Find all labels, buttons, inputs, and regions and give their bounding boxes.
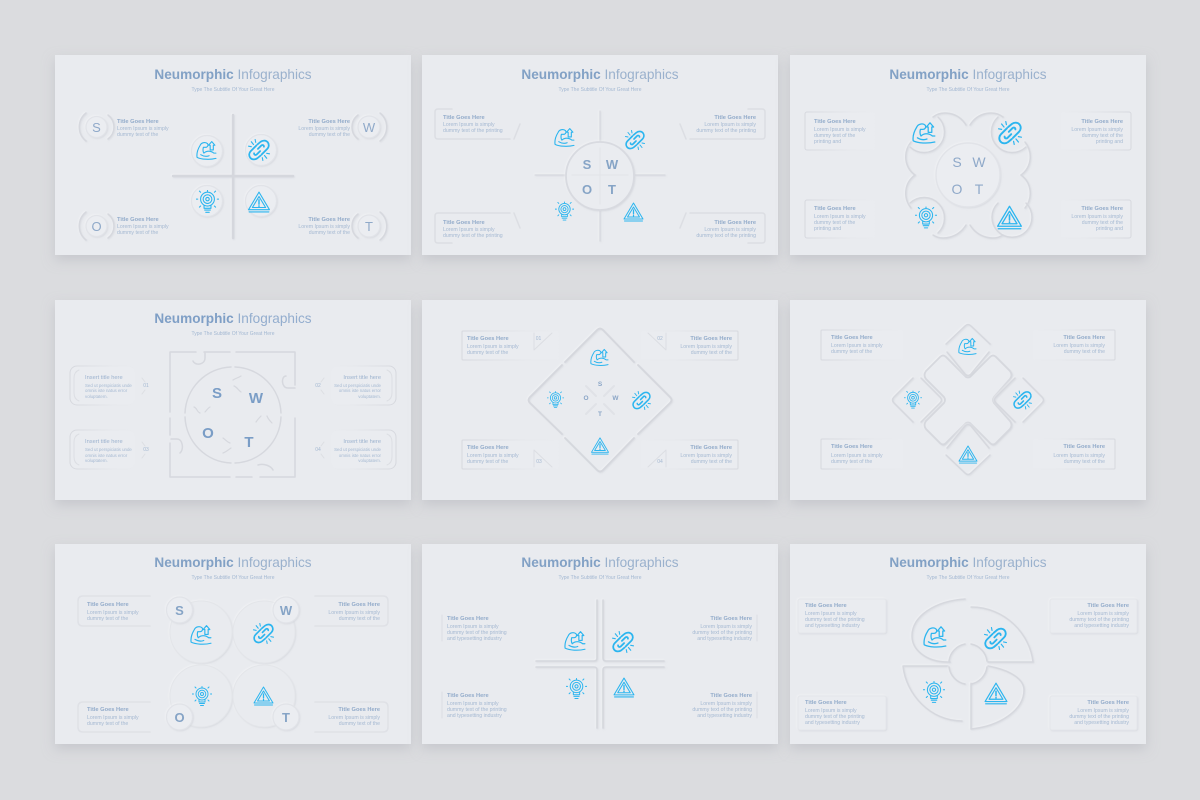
text box 04: Lorem Ipsum is simply (680, 453, 732, 459)
letters: O (582, 182, 592, 197)
text box: top left: Title Goes Here (831, 335, 873, 341)
panel: SWOT cross and diamonds (790, 300, 1146, 500)
text block: bottom right: Lorem Ipsum is simply (700, 701, 752, 707)
icon: warning (624, 203, 643, 221)
title: Neumorphic Infographics (521, 67, 679, 82)
text box 02: Lorem Ipsum is simply (680, 344, 732, 350)
text box: bottom right: Title Goes Here (1063, 444, 1105, 450)
subtitle: Type The Subtitle Of Your Great Here (558, 575, 642, 581)
text box: bottom left: Title Goes Here (831, 444, 873, 450)
text box: top right (680, 109, 765, 139)
text box: bottom left: dummy text of the (87, 721, 128, 727)
four circles (170, 601, 295, 727)
text box: top right: dummy text of the (1064, 349, 1105, 355)
text box: bottom right: Title Goes Here (1081, 206, 1123, 212)
text box: top left (821, 330, 903, 360)
text box: bottom right: dummy text of the (1064, 459, 1105, 465)
text box: top left (798, 599, 886, 633)
text box: top right: dummy text of the (1082, 133, 1123, 139)
text box: top right (315, 596, 388, 626)
subtitle: Type The Subtitle Of Your Great Here (926, 87, 1010, 93)
text box: top left: dummy text of the (814, 133, 855, 139)
text block: T (298, 217, 350, 236)
text box 01: Title Goes Here (467, 336, 509, 342)
text box 01: omnis iste natus error (85, 388, 128, 393)
title: Neumorphic Infographics (889, 67, 1047, 82)
letters: W (606, 157, 619, 172)
text box: bottom left: Lorem Ipsum is simply (87, 715, 139, 721)
text block: bottom right: dummy text of the printing (692, 707, 752, 713)
central circle (185, 367, 281, 463)
text box: bottom right (1033, 439, 1115, 469)
text box 04: Sed ut perspiciatis unde (334, 447, 382, 452)
panel: SWOT petals (790, 55, 1146, 255)
panel: SWOT quadrants (422, 544, 778, 744)
text box: bottom left (821, 439, 903, 469)
axis lines (535, 111, 665, 241)
icon circles (192, 134, 276, 216)
icon: link (254, 624, 273, 643)
text box: bottom right: Lorem Ipsum is simply (1071, 214, 1123, 220)
text box 02 (331, 366, 396, 405)
title: Neumorphic Infographics (154, 67, 312, 82)
text box: top right: Title Goes Here (1087, 603, 1129, 609)
text box 04: omnis iste natus error (339, 453, 382, 458)
text box: top right: Title Goes Here (338, 602, 380, 608)
icon: bulb (915, 207, 937, 228)
text block: top left: Lorem Ipsum is simply (447, 624, 499, 630)
letter circles (166, 597, 299, 730)
text box 04: voluptatem. (358, 458, 381, 463)
text block: S (117, 119, 169, 138)
puzzle squiggles (194, 376, 272, 453)
text box 03 (462, 440, 559, 469)
icon: arm (565, 632, 585, 650)
subtitle: Type The Subtitle Of Your Great Here (926, 575, 1010, 581)
number 01: 01 (143, 383, 149, 389)
letters (202, 385, 264, 451)
icon: link (249, 140, 269, 160)
S ring (79, 113, 114, 141)
letters (583, 381, 619, 418)
text box 04: dummy text of the (691, 459, 732, 465)
text box: bottom right: printing and (1096, 226, 1123, 232)
segment: bottom right (971, 666, 1024, 729)
icon: warning (614, 678, 634, 697)
icon: bulb (192, 686, 212, 706)
icon: arm (191, 626, 211, 644)
text box: bottom right: and typesetting industry (1074, 720, 1129, 726)
text box 02: voluptatem. (358, 394, 381, 399)
text block: top left (442, 615, 507, 642)
text box: top left: Title Goes Here (814, 119, 856, 125)
inner ring (949, 644, 987, 684)
icon: arm (924, 627, 946, 647)
text box: bottom left (435, 213, 520, 243)
text box: bottom right: dummy text of the (339, 721, 380, 727)
text block: O: Title Goes Here (117, 217, 159, 223)
text box: top right (1033, 330, 1115, 360)
icon: link (985, 628, 1006, 649)
text box 01: Sed ut perspiciatis unde (85, 383, 132, 388)
subtitle: Type The Subtitle Of Your Great Here (191, 87, 275, 93)
segment: bottom left (903, 666, 962, 721)
text block: top left: dummy text of the printing (447, 630, 507, 636)
text box 01: voluptatem. (85, 394, 108, 399)
text box 01: Lorem Ipsum is simply (467, 344, 519, 350)
O: O (91, 219, 102, 234)
number 04: 04 (315, 447, 321, 453)
text box: bottom left: Title Goes Here (814, 206, 856, 212)
text box 03: Title Goes Here (467, 445, 509, 451)
text box: bottom left: dummy text of the printing (443, 233, 503, 239)
letters (582, 157, 619, 197)
W ring (352, 113, 387, 141)
icon: link (999, 122, 1021, 144)
icon: bulb (923, 682, 945, 702)
text box: top left: and typesetting industry (805, 623, 860, 629)
quadrant dividers (536, 600, 664, 728)
text box: top left: Lorem Ipsum is simply (805, 611, 857, 617)
text box 01 (70, 366, 135, 405)
text box 04 (331, 430, 396, 469)
icon: warning (249, 192, 269, 212)
text box: bottom right (680, 213, 765, 243)
text box 04: Title Goes Here (690, 445, 732, 451)
letters: S (175, 603, 184, 618)
text box: top left (435, 109, 520, 139)
text box: top right: dummy text of the printing (696, 128, 756, 134)
text box: bottom left: and typesetting industry (805, 720, 860, 726)
text block: T: dummy text of the (309, 230, 350, 236)
text block: O: dummy text of the (117, 230, 158, 236)
text box: top right: printing and (1096, 139, 1123, 145)
text box: bottom left: Title Goes Here (805, 700, 847, 706)
text box: bottom right: dummy text of the printing (1069, 714, 1129, 720)
letters: T (608, 182, 616, 197)
subtitle: Type The Subtitle Of Your Great Here (191, 331, 275, 337)
text box: bottom left: dummy text of the (831, 459, 872, 465)
icon: warning (254, 687, 273, 705)
text box: top left: Title Goes Here (87, 602, 129, 608)
text box: bottom left: Lorem Ipsum is simply (814, 214, 866, 220)
text box: top right: Title Goes Here (714, 115, 756, 121)
text block: S: Title Goes Here (117, 119, 159, 125)
letters: S (598, 381, 603, 388)
central circle (566, 142, 634, 210)
text box 02 (641, 331, 738, 360)
text box: bottom left (805, 200, 875, 238)
text box 03: Lorem Ipsum is simply (467, 453, 519, 459)
letters: T (598, 411, 602, 418)
text box 02: 02 (657, 336, 663, 342)
text block: W: dummy text of the (309, 132, 350, 138)
text box: bottom right: dummy text of the (1082, 220, 1123, 226)
central X shape (924, 356, 1012, 444)
text block: top left: Title Goes Here (447, 616, 489, 622)
text box 02: Insert title here (343, 375, 381, 381)
panel: SWOT pinwheel (790, 544, 1146, 744)
text box 04: Insert title here (343, 439, 381, 445)
text box 02: dummy text of the (691, 350, 732, 356)
title: Neumorphic Infographics (154, 555, 312, 570)
text box 03: 03 (536, 459, 542, 465)
text block: top right: Lorem Ipsum is simply (700, 624, 752, 630)
inner divider (572, 148, 628, 204)
text block: top right: dummy text of the printing (692, 630, 752, 636)
text box: bottom right: Title Goes Here (1087, 700, 1129, 706)
text box 03: omnis iste natus error (85, 453, 128, 458)
text box: bottom left: Title Goes Here (443, 220, 485, 226)
T ring (352, 212, 387, 240)
icon: arm (197, 142, 216, 159)
text box: top right: and typesetting industry (1074, 623, 1129, 629)
text block: bottom left (442, 692, 507, 719)
panel: SWOT four circles (55, 544, 411, 744)
cross divider (173, 115, 293, 238)
text box: top left: Lorem Ipsum is simply (443, 122, 495, 128)
icon circle edges (910, 117, 1032, 237)
letters: T (975, 181, 984, 197)
text box: top left: Title Goes Here (443, 115, 485, 121)
text block: W: Title Goes Here (308, 119, 350, 125)
segment: top right (971, 607, 1033, 662)
text box: top left: dummy text of the printing (443, 128, 503, 134)
icon: warning (985, 683, 1007, 704)
title: Neumorphic Infographics (154, 311, 312, 326)
O ring (79, 212, 114, 240)
text box 04 (641, 440, 738, 469)
text box: top left: Lorem Ipsum is simply (814, 127, 866, 133)
text box: top left (805, 112, 875, 150)
icon: link (613, 632, 633, 652)
text box: bottom right: dummy text of the printing (696, 233, 756, 239)
text box: bottom right (1061, 200, 1131, 238)
text box: top left: dummy text of the printing (805, 617, 865, 623)
text block: W (298, 119, 350, 138)
icon: warning (591, 438, 609, 454)
text box 04: 04 (657, 459, 663, 465)
icon: arm (555, 129, 574, 146)
letters: O (583, 395, 589, 402)
text box: top right: dummy text of the (339, 616, 380, 622)
panel: SWOT puzzle (55, 300, 411, 500)
W: W (363, 120, 376, 135)
panel: SWOT diamond (422, 300, 778, 500)
icon: bulb (196, 190, 219, 212)
text box: top left: dummy text of the (87, 616, 128, 622)
text box: bottom right (315, 702, 388, 732)
letters (174, 603, 293, 725)
text block: bottom right: and typesetting industry (697, 713, 752, 719)
letters: W (612, 395, 619, 402)
text block: T: Title Goes Here (308, 217, 350, 223)
text box: bottom left: Lorem Ipsum is simply (443, 227, 495, 233)
text box: bottom left: dummy text of the printing (805, 714, 865, 720)
text block: bottom left: Title Goes Here (447, 693, 489, 699)
text block: bottom right: Title Goes Here (710, 693, 752, 699)
letters: O (952, 181, 963, 197)
text box 03: Sed ut perspiciatis unde (85, 447, 132, 452)
text box: bottom left: Lorem Ipsum is simply (805, 708, 857, 714)
text block: O (117, 217, 169, 236)
text box: top right (1050, 599, 1137, 633)
text box: top right: Lorem Ipsum is simply (328, 610, 380, 616)
text box: bottom right (1050, 696, 1137, 730)
icon: arm (913, 123, 935, 143)
top diamond (946, 324, 990, 376)
panel: SWOT central circle (422, 55, 778, 255)
petal outlines (906, 113, 1030, 238)
text box: bottom left (798, 696, 886, 730)
central circle (936, 143, 1000, 207)
segment: top left (912, 599, 965, 662)
text box: top right: Title Goes Here (1063, 335, 1105, 341)
text block: O: Lorem Ipsum is simply (117, 224, 169, 230)
icon: bulb (555, 202, 574, 220)
text box 03: dummy text of the (467, 459, 508, 465)
letters: W (249, 390, 264, 407)
text box: bottom right: Lorem Ipsum is simply (704, 227, 756, 233)
number 02 (315, 378, 324, 394)
text block: S: dummy text of the (117, 132, 158, 138)
text box 02: Title Goes Here (690, 336, 732, 342)
text box 03 (70, 430, 135, 469)
letters: T (244, 434, 254, 451)
icon: arm (959, 338, 976, 354)
text block: bottom right (692, 692, 757, 719)
title: Neumorphic Infographics (521, 555, 679, 570)
text box: bottom left: printing and (814, 226, 841, 232)
text block: top right (692, 615, 757, 642)
left diamond (892, 378, 942, 422)
text box 03: voluptatem. (85, 458, 108, 463)
panel: SWOT cross with letter rings (55, 55, 411, 255)
T: T (365, 219, 373, 234)
text block: bottom left: dummy text of the printing (447, 707, 507, 713)
diamond outline (528, 328, 672, 472)
text box: top right (1061, 112, 1131, 150)
icon: warning (959, 446, 977, 463)
text block: W: Lorem Ipsum is simply (298, 126, 350, 132)
text box 01 (462, 331, 559, 360)
letters (952, 154, 986, 197)
title: Neumorphic Infographics (889, 555, 1047, 570)
number 01 (142, 378, 149, 394)
S: S (92, 120, 101, 135)
text box: top right: Lorem Ipsum is simply (1053, 343, 1105, 349)
text box 02: Sed ut perspiciatis unde (334, 383, 382, 388)
text box: top right: Title Goes Here (1081, 119, 1123, 125)
number 03 (142, 442, 149, 458)
text box: top left: Lorem Ipsum is simply (87, 610, 139, 616)
icon: warning (998, 206, 1021, 229)
text box: top left: dummy text of the (831, 349, 872, 355)
text block: S: Lorem Ipsum is simply (117, 126, 169, 132)
text block: top right: Title Goes Here (710, 616, 752, 622)
text box: bottom right: Title Goes Here (338, 707, 380, 713)
number 04 (315, 442, 324, 458)
centre cross (586, 386, 614, 414)
text block: bottom left: and typesetting industry (447, 713, 502, 719)
bottom diamond (946, 424, 990, 474)
letters: O (202, 425, 214, 442)
text box: top right: Lorem Ipsum is simply (1071, 127, 1123, 133)
icon: bulb (904, 391, 922, 408)
text box: top right: dummy text of the printing (1069, 617, 1129, 623)
text box: bottom right: Lorem Ipsum is simply (328, 715, 380, 721)
text box: top right: Lorem Ipsum is simply (704, 122, 756, 128)
text box: top left: printing and (814, 139, 841, 145)
number 03: 03 (143, 447, 149, 453)
text box 02: omnis iste natus error (339, 388, 382, 393)
subtitle: Type The Subtitle Of Your Great Here (558, 87, 642, 93)
subtitle: Type The Subtitle Of Your Great Here (191, 575, 275, 581)
text box: bottom left: Lorem Ipsum is simply (831, 453, 883, 459)
icon: arm (591, 349, 608, 365)
text box: bottom right: Title Goes Here (714, 220, 756, 226)
letters: S (952, 154, 962, 170)
text box: top left: Lorem Ipsum is simply (831, 343, 883, 349)
text box: bottom left: Title Goes Here (87, 707, 129, 713)
letters: W (280, 603, 293, 618)
puzzle frame (170, 352, 295, 477)
icon: link (626, 130, 644, 150)
text box: bottom right: Lorem Ipsum is simply (1053, 453, 1105, 459)
text box 01: Insert title here (85, 375, 123, 381)
letters: W (972, 154, 986, 170)
icon: link (1013, 391, 1032, 409)
letters: S (583, 157, 592, 172)
text box: top right: Lorem Ipsum is simply (1077, 611, 1129, 617)
text box: bottom left: dummy text of the (814, 220, 855, 226)
right diamond (994, 378, 1044, 422)
text box 03: Insert title here (85, 439, 123, 445)
text box 01: dummy text of the (467, 350, 508, 356)
icon: bulb (547, 392, 564, 408)
text block: T: Lorem Ipsum is simply (298, 224, 350, 230)
text block: bottom left: Lorem Ipsum is simply (447, 701, 499, 707)
letters: S (212, 385, 222, 402)
text block: top right: and typesetting industry (697, 636, 752, 642)
letters: O (174, 710, 185, 725)
text box: bottom left (78, 702, 150, 732)
text box 01: 01 (536, 336, 541, 342)
text box: top left: Title Goes Here (805, 603, 847, 609)
text block: top left: and typesetting industry (447, 636, 502, 642)
letters: T (282, 710, 290, 725)
icon: link (632, 391, 651, 410)
text box: bottom right: Lorem Ipsum is simply (1077, 708, 1129, 714)
icon: bulb (566, 678, 587, 698)
text box: top left (78, 596, 150, 626)
number 02: 02 (315, 383, 321, 389)
